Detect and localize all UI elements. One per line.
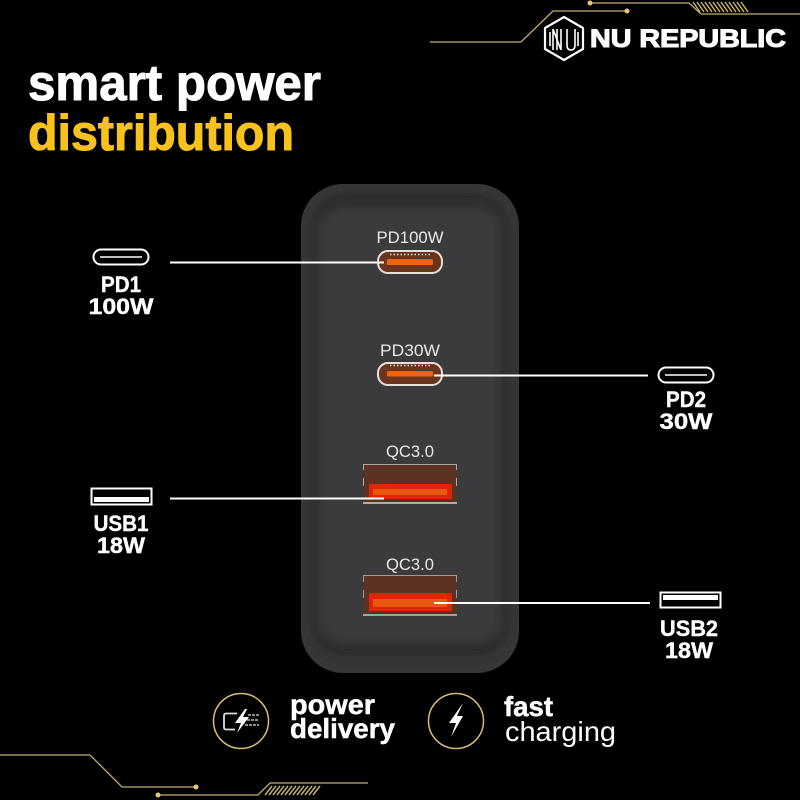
label: USB1 18W: USB1 [94, 511, 148, 536]
text: power delivery: delivery [290, 713, 395, 744]
charger body [301, 184, 519, 673]
logo: Nu Republic [545, 17, 786, 60]
label: USB2 18W: USB2 [660, 616, 718, 641]
port: USB-A lower [363, 576, 457, 615]
title: distribution [28, 105, 294, 161]
feature: power delivery [214, 689, 395, 748]
text: power delivery: power [290, 689, 375, 720]
port label: PD30W: PD30W [380, 341, 440, 360]
text: power delivery [290, 689, 395, 744]
port label: QC3.0 upper: QC3.0 [386, 442, 434, 461]
callout: USB2 18W [434, 592, 720, 663]
title: smart power [28, 55, 321, 111]
charger [301, 184, 519, 673]
label: PD2 30W: 30W [660, 409, 713, 434]
port: USB-A upper [363, 464, 457, 503]
port label: PD100W: PD100W [376, 228, 444, 247]
title [28, 55, 321, 161]
icon: USB-A port [92, 488, 152, 504]
feature: fast charging [428, 691, 616, 748]
label: PD2 30W: PD2 [666, 387, 706, 412]
circuit lines: top right [430, 0, 800, 42]
callout: PD1 100W [88, 250, 384, 319]
text: fast charging [504, 691, 616, 747]
label: USB2 18W [660, 616, 718, 663]
label: PD1 100W: PD1 [101, 272, 141, 297]
icon: USB-A port [660, 592, 720, 608]
port: USB-C PD100W [378, 251, 442, 273]
text: fast charging: charging [505, 716, 616, 747]
circuit lines: bottom [0, 755, 368, 798]
callout: PD2 30W [434, 368, 714, 434]
port: USB-C PD30W [378, 363, 442, 385]
label: PD2 30W [660, 387, 713, 434]
callout: USB1 18W [92, 488, 384, 558]
icon: USB-C port [94, 250, 148, 264]
icon: lightning bolt [428, 694, 484, 748]
port label: QC3.0 lower: QC3.0 [386, 555, 434, 574]
text: fast charging: fast [504, 691, 553, 722]
label: USB1 18W: 18W [97, 533, 145, 558]
icon: battery bolt [214, 694, 268, 748]
label: USB2 18W: 18W [665, 638, 713, 663]
label: PD1 100W [88, 272, 154, 319]
label: USB1 18W [94, 511, 148, 558]
icon: USB-C port [658, 368, 714, 382]
label: PD1 100W: 100W [88, 294, 154, 319]
logo: Nu Republic: NU REPUBLIC [590, 25, 786, 53]
